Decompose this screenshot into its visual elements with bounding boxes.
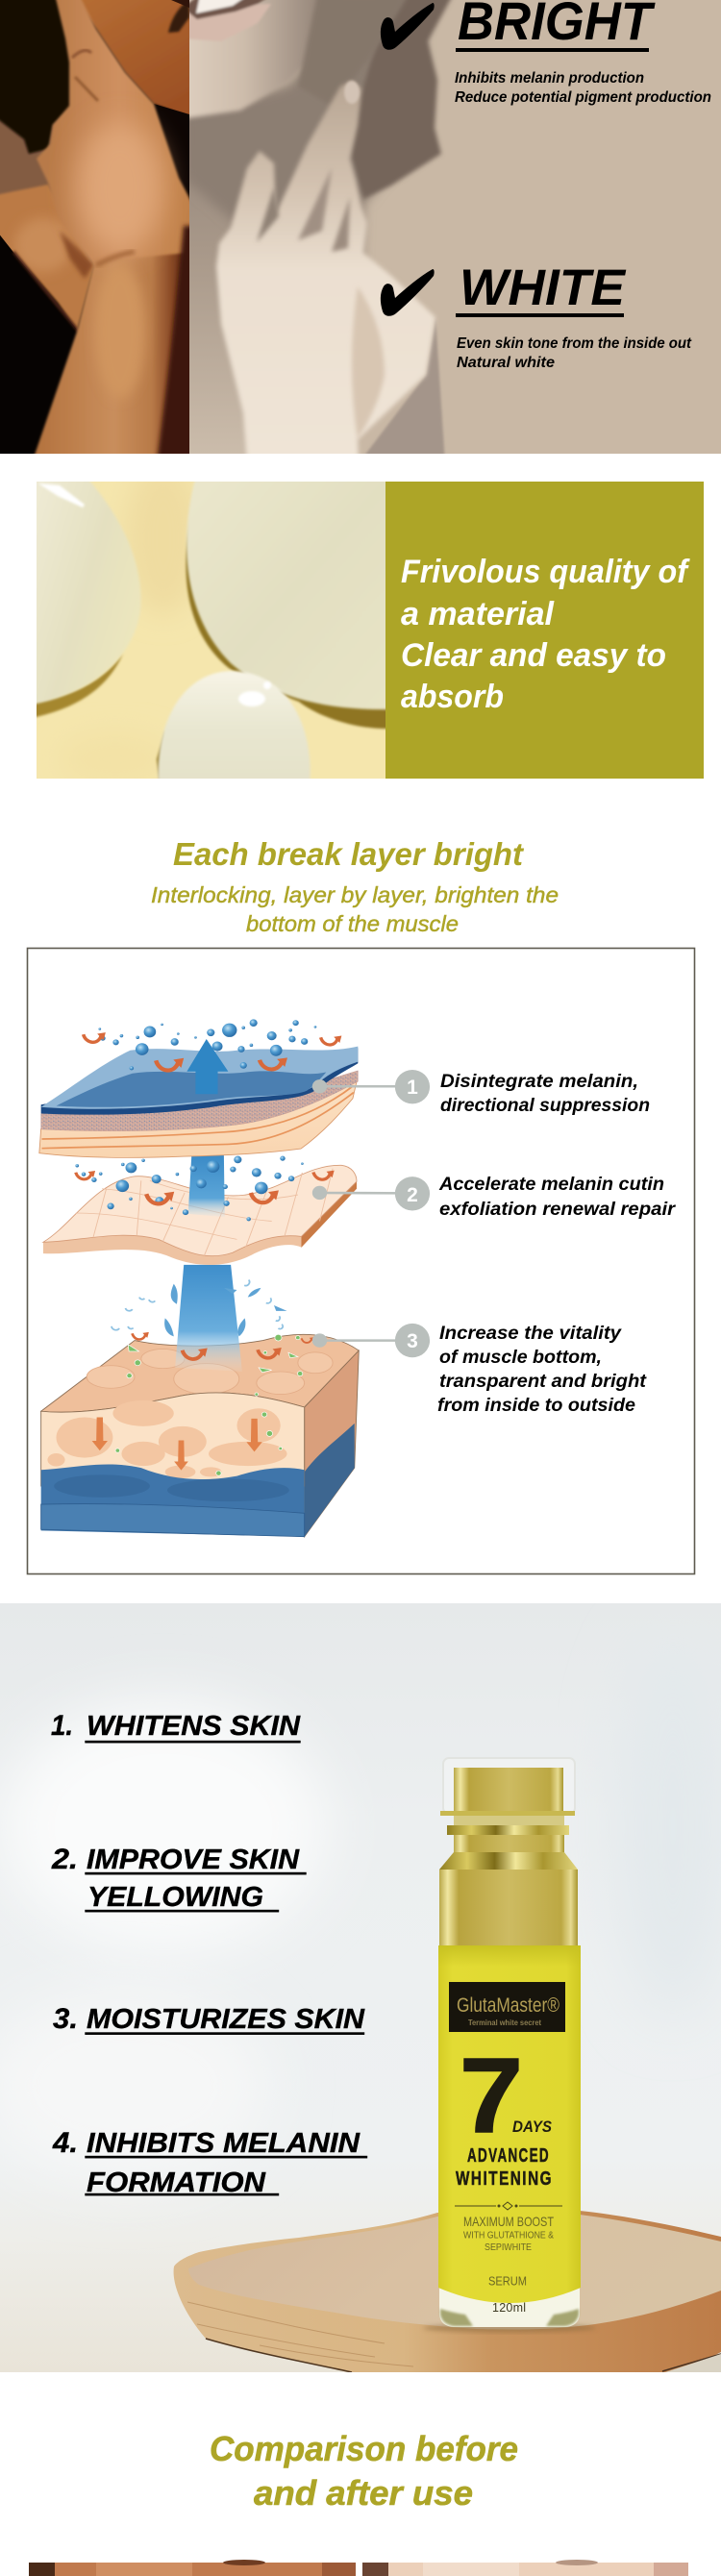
text: white details: Natural white	[457, 355, 555, 371]
layer 2: grid epidermis sheet	[43, 1165, 357, 1265]
photo: after use	[362, 2560, 688, 2576]
callout 1 marker	[312, 1070, 430, 1103]
text: callout 3: of muscle bottom,	[439, 1347, 602, 1368]
photo: dark original skin	[0, 0, 199, 463]
list: benefit 4	[52, 2127, 367, 2198]
text: callout 3: from inside to outside	[437, 1395, 635, 1416]
list: benefit 2: 2.	[51, 1844, 78, 1875]
text: bright details: Reduce potential pigment production	[455, 89, 711, 106]
label: volume: 120ml	[492, 2301, 526, 2315]
label: seven days: 7	[460, 2037, 523, 2155]
text: bright details: Inhibits melanin production	[455, 70, 644, 87]
text: material description	[401, 554, 690, 715]
text: callout 1: Disintegrate melanin,	[440, 1071, 638, 1092]
layer 3: deep tissue block	[41, 1334, 359, 1537]
callout 3 marker	[312, 1324, 430, 1357]
label: brand block	[449, 1982, 565, 2032]
text: white details	[457, 335, 692, 371]
bottle body	[439, 2288, 580, 2327]
panel: olive text block	[385, 482, 704, 779]
subheading: Interlocking, layer by layer, brighten the	[151, 882, 559, 907]
list: benefit 2: IMPROVE SKIN	[87, 1845, 300, 1875]
product: serum bottle	[438, 1758, 581, 2327]
text: callout 2: Accelerate melanin cutin	[438, 1174, 664, 1195]
label: ingredients: WITH GLUTATHIONE &	[463, 2230, 554, 2242]
panel: product benefits scene	[0, 1603, 721, 2373]
label: advanced whitening: WHITENING	[456, 2168, 553, 2190]
subheading: bottom of the muscle	[246, 911, 459, 936]
label: brand block: Terminal white secret	[468, 2018, 541, 2027]
heading: white: WHITE	[460, 260, 627, 316]
arrow: upward blue	[186, 1039, 228, 1094]
beam: blue serum lower	[175, 1265, 242, 1372]
label: seven days: DAYS	[512, 2118, 553, 2136]
photo: before use	[29, 2560, 356, 2576]
text: material description: a material	[401, 596, 556, 632]
callout numbers: 2	[407, 1184, 418, 1206]
label: advanced whitening	[456, 2145, 553, 2190]
list: benefit 3: MOISTURIZES SKIN	[87, 2004, 365, 2035]
text: material description: Clear and easy to	[401, 637, 666, 674]
callout numbers	[407, 1077, 418, 1352]
bubbles: melanin particles	[75, 1019, 316, 1221]
text: callout 1	[440, 1071, 650, 1116]
label: ingredients: SEPIWHITE	[485, 2242, 532, 2253]
heading: each break layer bright: Each break layer bright	[173, 836, 525, 872]
label: brand block: GlutaMaster®	[457, 1994, 559, 2017]
label: advanced whitening: ADVANCED	[467, 2145, 550, 2167]
layer 1: top skin stack	[39, 1039, 358, 1157]
icon: check mark bright	[381, 3, 435, 50]
chart: skin layers illustration	[39, 1019, 430, 1537]
heading: comparison before and after use: Comparison before	[210, 2429, 518, 2468]
list: benefit 4: FORMATION	[87, 2167, 266, 2198]
text: callout 3: transparent and bright	[439, 1371, 648, 1392]
list: benefit 2: YELLOWING	[87, 1882, 263, 1913]
text: white details: Even skin tone from the inside out	[457, 335, 692, 352]
arrows: orange circular	[76, 1032, 341, 1359]
beam: blue serum middle	[188, 1154, 225, 1217]
leaves: blue fragments	[164, 1284, 287, 1336]
list: benefit 1: 1.	[51, 1710, 73, 1742]
text: material description: absorb	[401, 679, 504, 715]
heading: comparison before and after use	[210, 2429, 518, 2513]
arrows: orange downward	[92, 1418, 262, 1471]
list: benefit 4: INHIBITS MELANIN	[87, 2128, 360, 2159]
subheading	[151, 882, 559, 936]
dots: green nutrients	[115, 1334, 303, 1475]
text: callout 2: exfoliation renewal repair	[439, 1199, 676, 1220]
text: callout 2	[438, 1174, 676, 1220]
list: benefit 3: 3.	[53, 2003, 78, 2035]
photo: whitened desaturated skin	[180, 0, 721, 463]
text: material description: Frivolous quality of	[401, 554, 690, 590]
callout numbers: 3	[407, 1330, 418, 1352]
panel: serum droplets photo	[37, 482, 385, 779]
label: ingredients	[463, 2214, 554, 2288]
callout numbers: 1	[407, 1077, 418, 1099]
list: benefit 2	[51, 1844, 306, 1913]
text: bright details	[455, 70, 711, 106]
text: callout 3: Increase the vitality	[439, 1323, 622, 1344]
wooden tray	[174, 2211, 721, 2373]
callout 2 marker	[312, 1177, 430, 1210]
bottle cap	[439, 1758, 578, 1945]
label: seven days	[460, 2037, 553, 2155]
label: ingredients: MAXIMUM BOOST	[463, 2214, 554, 2229]
list: benefit 1: WHITENS SKIN	[87, 1711, 301, 1742]
heading: comparison before and after use: and after use	[254, 2473, 473, 2513]
text: callout 3	[437, 1323, 648, 1416]
list: benefit 4: 4.	[52, 2127, 78, 2159]
bubbles: open rings	[112, 1279, 283, 1330]
panel: skin layers diagram frame	[27, 948, 694, 1574]
icon: check mark white	[381, 269, 435, 316]
text: callout 1: directional suppression	[440, 1095, 650, 1116]
label: divider	[455, 2202, 562, 2210]
label: ingredients: SERUM	[488, 2274, 527, 2288]
hero panel: before and after skin photo	[0, 0, 721, 463]
